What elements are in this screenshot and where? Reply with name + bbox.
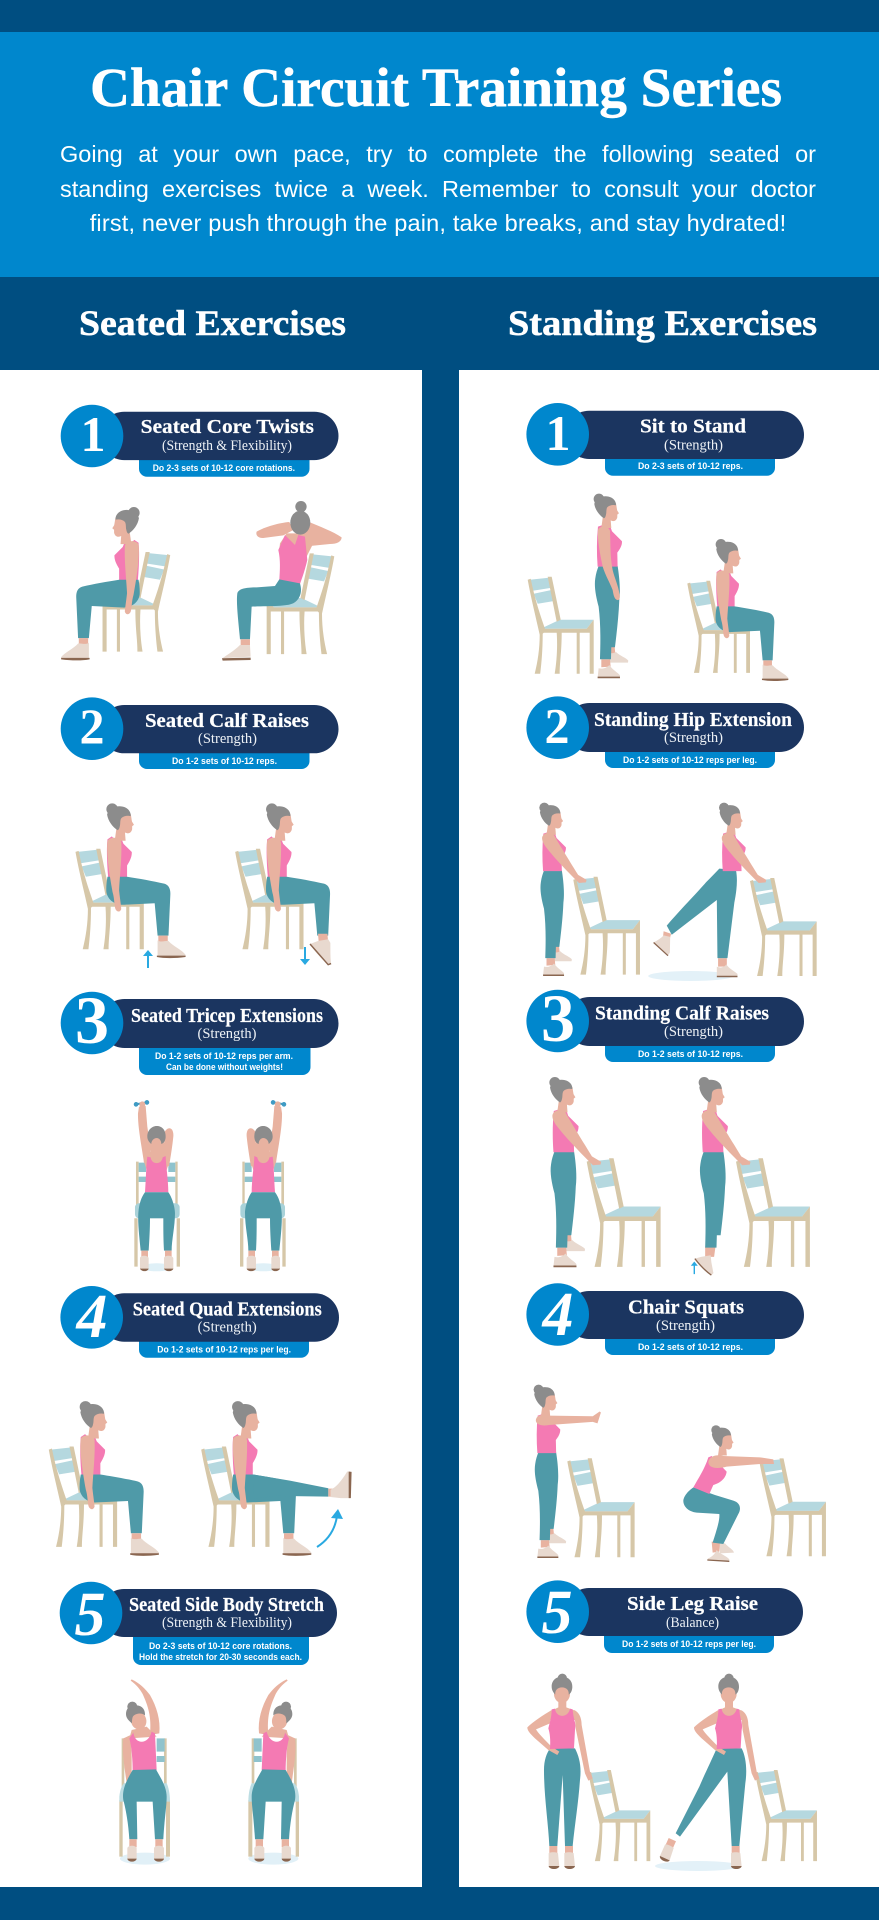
icon: up arrow xyxy=(143,950,153,968)
icon: down arrow xyxy=(300,947,310,965)
standing 3 header: (Strength) xyxy=(664,1024,723,1040)
heading: seated exercises: Seated Exercises xyxy=(79,303,346,343)
floor shadow xyxy=(655,1861,741,1871)
title: Chair Circuit Training Series xyxy=(90,57,782,118)
figure: standing side view xyxy=(594,494,628,678)
floor shadow xyxy=(648,971,733,981)
seated 2 header: (Strength) xyxy=(198,731,257,747)
top band xyxy=(0,0,879,32)
figure: side leg raised xyxy=(659,1674,759,1869)
figure: hip extension start xyxy=(539,803,587,976)
figure: seated core twist xyxy=(222,501,342,661)
figure: calf raise heels down xyxy=(75,803,186,958)
icon: up arrow xyxy=(691,1262,698,1274)
intro text: Going at your own pace, try to complete the following seated or xyxy=(60,141,816,167)
panel: standing exercises xyxy=(459,370,879,1887)
seated 3 header: (Strength) xyxy=(198,1026,257,1042)
figure: calf raise on toes xyxy=(695,1077,750,1275)
standing 5 header: (Balance) xyxy=(666,1615,719,1631)
seated 4 header: (Strength) xyxy=(198,1320,257,1336)
chair xyxy=(588,1770,650,1861)
icon: curved arrow xyxy=(317,1509,343,1547)
figure: quad extension start xyxy=(49,1401,159,1556)
figure: calf raise heels up xyxy=(235,803,331,965)
standing 2 header: (Strength) xyxy=(664,730,723,746)
standing 1 header xyxy=(526,403,804,476)
standing 2 header: Standing Hip Extension xyxy=(594,710,792,731)
seated 3 header: 3 xyxy=(75,982,109,1058)
figure: tricep extension left arm xyxy=(240,1100,287,1271)
figure: calf raise flat feet xyxy=(549,1077,601,1267)
standing 2 header xyxy=(526,696,804,768)
intro text: standing exercises twice a week. Remember to consult your doctor xyxy=(60,176,816,202)
chair xyxy=(736,1158,810,1267)
standing 3 header: Do 1-2 sets of 10-12 reps. xyxy=(638,1049,743,1060)
panel: seated exercises xyxy=(0,370,422,1887)
figure: side stretch left xyxy=(119,1679,170,1865)
figure: side leg raise start xyxy=(527,1674,593,1869)
chair xyxy=(587,1158,661,1267)
figure: squat low xyxy=(683,1425,826,1562)
standing 2 header: Do 1-2 sets of 10-12 reps per leg. xyxy=(623,755,757,766)
seated 2 header: Do 1-2 sets of 10-12 reps. xyxy=(172,756,277,767)
chair xyxy=(567,1458,635,1557)
seated 5 header: 5 xyxy=(74,1581,106,1649)
standing 5 header xyxy=(526,1579,803,1653)
standing 4 header: Do 1-2 sets of 10-12 reps. xyxy=(638,1342,743,1353)
figure: squat standing xyxy=(534,1385,601,1558)
seated 2 header xyxy=(61,697,338,769)
seated 1 header: Do 2-3 sets of 10-12 core rotations. xyxy=(153,463,295,474)
figure: seated side view xyxy=(687,539,788,681)
seated 1 header xyxy=(61,405,338,477)
seated 1 header: 1 xyxy=(80,406,106,462)
standing 3 header: Standing Calf Raises xyxy=(595,1004,769,1024)
standing 1 header: (Strength) xyxy=(664,437,723,453)
intro text xyxy=(60,141,816,236)
standing 3 header: 3 xyxy=(541,980,575,1056)
seated 3 header: Seated Tricep Extensions xyxy=(131,1006,323,1027)
figure: quad extension raised leg xyxy=(201,1401,352,1556)
seated 5 header: (Strength & Flexibility) xyxy=(162,1615,292,1631)
seated 5 header: Hold the stretch for 20-30 seconds each. xyxy=(139,1652,302,1663)
seated 5 header xyxy=(60,1581,337,1665)
chair xyxy=(755,1770,817,1861)
standing 4 header xyxy=(526,1281,804,1355)
seated 5 header: Do 2-3 sets of 10-12 core rotations. xyxy=(149,1641,292,1652)
standing 4 header: 4 xyxy=(542,1281,574,1349)
standing 1 header: 1 xyxy=(546,405,570,461)
seated 4 header: Seated Quad Extensions xyxy=(133,1300,322,1321)
seated 3 header: Can be done without weights! xyxy=(166,1062,283,1073)
seated 3 header: Do 1-2 sets of 10-12 reps per arm. xyxy=(155,1051,293,1062)
figure: hip extension leg back xyxy=(654,803,766,977)
figure: seated side view xyxy=(61,507,170,660)
standing 3 header xyxy=(526,980,804,1062)
standing 1 header: Do 2-3 sets of 10-12 reps. xyxy=(638,461,743,472)
figure: tricep extension right arm xyxy=(133,1100,180,1271)
seated 3 header xyxy=(61,982,338,1075)
standing 5 header: Do 1-2 sets of 10-12 reps per leg. xyxy=(622,1639,756,1650)
seated 1 header: (Strength & Flexibility) xyxy=(162,438,292,454)
seated 2 header: 2 xyxy=(80,698,104,754)
seated 4 header xyxy=(60,1283,339,1358)
standing 4 header: Chair Squats xyxy=(628,1298,744,1318)
intro text: first, never push through the pain, take breaks, and stay hydrated! xyxy=(90,210,786,236)
heading: standing exercises: Standing Exercises xyxy=(508,303,817,343)
seated 4 header: 4 xyxy=(76,1283,108,1351)
standing 1 header: Sit to Stand xyxy=(640,417,746,438)
standing 5 header: 5 xyxy=(542,1579,572,1647)
seated 1 header: Seated Core Twists xyxy=(141,417,314,438)
chair xyxy=(573,877,640,975)
seated 4 header: Do 1-2 sets of 10-12 reps per leg. xyxy=(157,1345,291,1356)
seated 2 header: Seated Calf Raises xyxy=(145,711,309,732)
seated 5 header: Seated Side Body Stretch xyxy=(129,1595,324,1616)
standing 5 header: Side Leg Raise xyxy=(627,1594,758,1615)
standing 2 header: 2 xyxy=(544,698,570,754)
chair xyxy=(750,878,817,976)
figure: side stretch right xyxy=(248,1679,299,1865)
standing 4 header: (Strength) xyxy=(656,1318,715,1334)
chair xyxy=(528,577,594,674)
header panel xyxy=(0,32,879,277)
